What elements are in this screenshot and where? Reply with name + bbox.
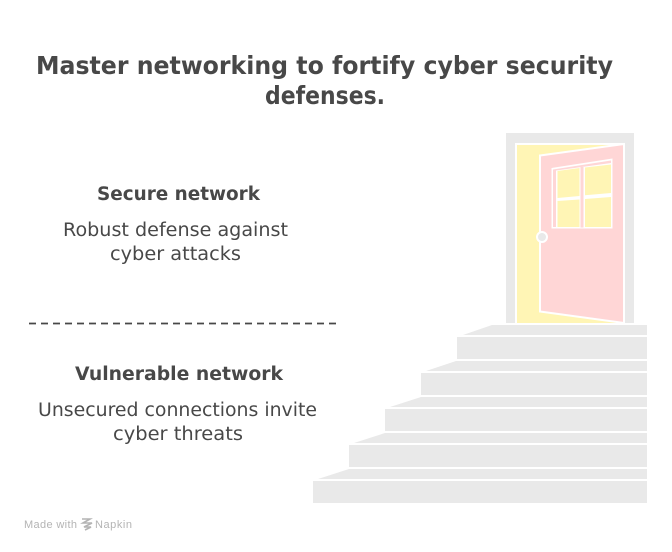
watermark: Made with xyxy=(24,519,77,531)
icon: staircase xyxy=(313,325,647,503)
title: defenses. xyxy=(265,81,385,110)
text: vulnerable network description xyxy=(38,400,317,445)
icon: open door xyxy=(506,133,634,323)
door panel xyxy=(540,144,624,323)
door window xyxy=(552,158,612,228)
panel: secure network xyxy=(63,184,288,265)
title xyxy=(36,51,613,110)
text: secure network description: Robust defense against xyxy=(63,220,288,241)
icon: napkin logo xyxy=(82,519,92,530)
door knob xyxy=(537,232,547,242)
panel: vulnerable network xyxy=(38,364,317,445)
text: secure network description xyxy=(63,220,288,265)
title: Master networking to fortify cyber security xyxy=(36,51,613,80)
text: vulnerable network description: cyber threats xyxy=(113,424,243,445)
text: secure network description: cyber attacks xyxy=(110,244,241,265)
heading: secure network: Secure network xyxy=(97,184,261,205)
doorway light xyxy=(517,145,624,323)
watermark xyxy=(24,519,132,531)
watermark: Napkin xyxy=(95,519,132,531)
text: vulnerable network description: Unsecured connections invite xyxy=(38,400,317,421)
heading: vulnerable network: Vulnerable network xyxy=(75,364,284,385)
door frame xyxy=(506,133,634,323)
